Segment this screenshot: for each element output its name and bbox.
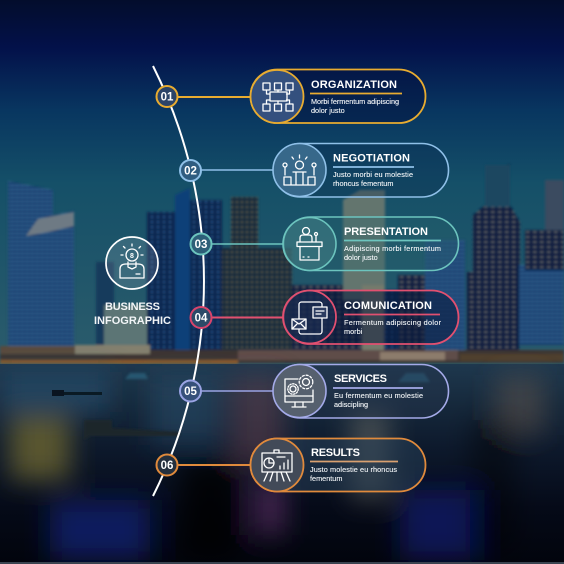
pill panel 02 [274, 144, 448, 197]
step 02: negotiation [180, 144, 448, 197]
pill panel 03 [284, 217, 458, 270]
heading: business infographic: INFOGRAPHIC [94, 315, 171, 327]
step number 02 [180, 160, 201, 181]
step 01: organization [156, 70, 426, 123]
title: presentation: PRESENTATION [344, 226, 428, 238]
pill panel 04 [284, 290, 458, 344]
step 04: comunication [190, 290, 458, 344]
description 06: fementum [310, 474, 342, 483]
step number 03 [190, 234, 212, 254]
description 04 [344, 318, 442, 336]
step number 04: 04 [195, 313, 208, 325]
icon: chart board [250, 438, 304, 492]
description 06: Justo molestie eu rhoncus [310, 465, 397, 474]
step number 03: 03 [195, 239, 207, 251]
heading: business infographic: BUSINESS [105, 301, 160, 313]
description 01 [311, 97, 399, 115]
description 05: Eu fermentum eu molestie [334, 391, 423, 400]
step number 06: 06 [161, 460, 173, 472]
title: results: RESULTS [311, 447, 360, 459]
icon: negotiation table [273, 144, 326, 196]
pill panel 06 [250, 438, 426, 492]
icon: org chart [250, 70, 304, 123]
timeline curve [153, 66, 204, 496]
step 03: presentation [190, 217, 458, 270]
step 06: results [156, 438, 426, 492]
step number 02: 02 [184, 166, 197, 178]
description 03: Adipiscing morbi fermentum [344, 244, 441, 253]
step number 05: 05 [184, 386, 197, 398]
pill panel 01 [250, 70, 426, 123]
description 02 [333, 170, 413, 188]
step number 01 [156, 86, 178, 107]
title: organization: ORGANIZATION [311, 79, 397, 91]
icon: computer with gears [273, 364, 326, 418]
title: services: SERVICES [334, 373, 387, 385]
step number 04 [190, 307, 212, 328]
description 05: adiscipling [334, 400, 368, 409]
step number 06 [156, 454, 178, 476]
step 05: services [180, 364, 448, 418]
description 02: rhoncus fementum [333, 179, 393, 188]
step number 05 [180, 380, 201, 402]
icon: podium speaker [283, 218, 336, 270]
title: comunication: COMUNICATION [344, 300, 432, 312]
description 03 [344, 244, 441, 262]
description 03: dolor justo [344, 253, 378, 262]
description 01: dolor justo [311, 106, 345, 115]
step number 01: 01 [161, 92, 174, 104]
description 04: Fermentum adipiscing dolor [344, 318, 442, 327]
title: negotiation: NEGOTIATION [333, 152, 410, 164]
description 06 [310, 465, 397, 483]
description 02: Justo morbi eu molestie [333, 170, 413, 179]
pill panel 05 [274, 364, 448, 418]
heading: business infographic [94, 301, 171, 327]
description 01: Morbi fermentum adipiscing [311, 97, 399, 106]
central icon: business idea: 8 [130, 253, 134, 260]
icon: phone and messages [283, 290, 336, 344]
description 05 [334, 391, 423, 409]
description 04: morbi [344, 327, 363, 336]
central icon: business idea [106, 237, 158, 289]
